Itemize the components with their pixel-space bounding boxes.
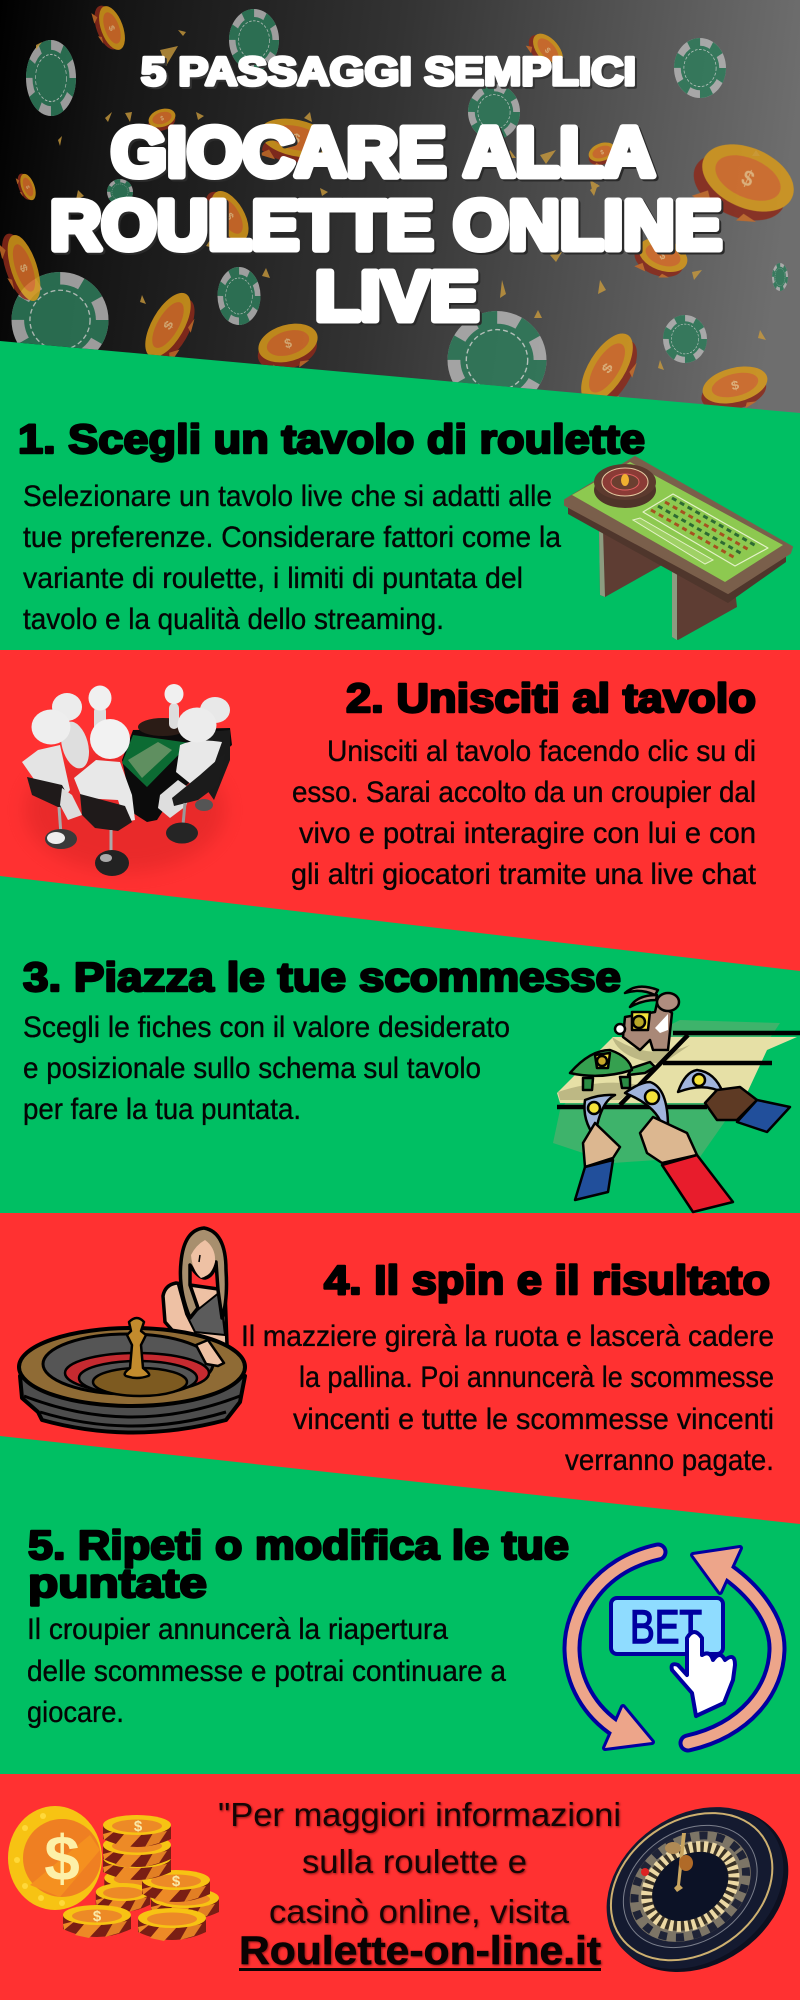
panel: header background with chips and coins — [0, 0, 800, 420]
center hand — [625, 1082, 733, 1212]
dollar signs: $ — [172, 1873, 181, 1890]
text: step 4 body — [241, 1320, 774, 1477]
dollar signs: $ — [93, 1908, 102, 1925]
big coin — [8, 1806, 102, 1910]
title: giocare alla roulette online live: GIOCARE ALLA — [111, 113, 655, 191]
scattered coins — [0, 1, 800, 418]
text: step 2 body: vivo e potrai interagire con lui e con — [299, 817, 756, 850]
heading: step 4: 4. Il spin e il risultato — [324, 1257, 770, 1303]
back players — [56, 718, 94, 772]
text: step 4 body: vincenti e tutte le scommesse vincenti — [293, 1403, 774, 1436]
text: footer call to action: casinò online, visita — [269, 1893, 570, 1930]
text: step 1 body: tue preferenze. Considerare fattori come la — [23, 521, 561, 554]
text: footer call to action — [218, 1796, 621, 1973]
confetti — [36, 30, 766, 370]
heading: step 5: 5. Ripeti o modifica le tue — [28, 1522, 569, 1568]
title: giocare alla roulette online live — [50, 113, 722, 335]
table — [122, 728, 232, 822]
right player — [176, 741, 222, 785]
heading: step 5: puntate — [28, 1560, 207, 1606]
text: step 2 body: gli altri giocatori tramite una live chat — [291, 858, 757, 891]
dealer hand — [196, 1340, 224, 1366]
text: step 4 body: verranno pagate. — [565, 1444, 774, 1477]
text: footer call to action: sulla roulette e — [302, 1843, 527, 1880]
icon: gold coins — [8, 1806, 219, 1941]
croupier — [163, 1228, 227, 1352]
text: step 5 body: Il croupier annuncerà la riapertura — [27, 1613, 448, 1646]
bet button — [611, 1598, 723, 1654]
front player — [74, 760, 135, 822]
icon: bet button with cycle arrows: BET — [630, 1600, 702, 1653]
panel: step 4 — [19, 1228, 774, 1477]
text: step 2 body: esso. Sarai accolto da un croupier dal — [292, 776, 756, 809]
turtle — [570, 1050, 655, 1090]
text: footer call to action: Roulette-on-line.it — [239, 1929, 601, 1973]
left hand — [575, 1095, 620, 1200]
text: step 5 body: giocare. — [27, 1696, 124, 1729]
rabbit — [615, 987, 679, 1050]
text: step 5 body — [27, 1613, 506, 1729]
cycle arrows — [572, 1548, 777, 1748]
heading: step 5 — [28, 1522, 569, 1606]
icon: hands placing chips on betting table — [553, 987, 800, 1212]
panel: step 1 — [18, 416, 792, 640]
heading: step 3: 3. Piazza le tue scommesse — [23, 954, 621, 1000]
panel: step 2 — [22, 675, 757, 891]
icon: roulette wheel — [575, 1772, 800, 2000]
left player — [22, 745, 70, 798]
text: step 1 body — [23, 480, 561, 636]
text: step 5 body: delle scommesse e potrai continuare a — [27, 1655, 506, 1688]
wheel spindle — [674, 1833, 686, 1892]
heading: step 2: 2. Unisciti al tavolo — [346, 675, 756, 721]
panel: step 3 — [23, 954, 800, 1212]
text: step 3 body: per fare la tua puntata. — [23, 1093, 301, 1126]
title: 5 passaggi semplici: 5 PASSAGGI SEMPLICI — [141, 50, 636, 94]
wheel base — [20, 1376, 245, 1432]
icon: players around a roulette table — [22, 684, 232, 876]
text: step 2 body: Unisciti al tavolo facendo clic su di — [327, 735, 756, 768]
text: step 2 body — [291, 735, 757, 891]
title: giocare alla roulette online live: ROULETTE ONLINE — [50, 186, 722, 264]
text: step 1 body: Selezionare un tavolo live che si adatti alle — [23, 480, 552, 513]
text: step 3 body — [23, 1011, 510, 1126]
icon: gold coins: $ — [44, 1822, 80, 1894]
coin stacks — [104, 1868, 176, 1901]
panel: footer — [8, 1772, 800, 2000]
icon: bet button with cycle arrows — [572, 1548, 777, 1748]
spindle — [125, 1318, 149, 1378]
title: giocare alla roulette online live: LIVE — [315, 257, 479, 335]
text: step 3 body: e posizionale sullo schema sul tavolo — [23, 1052, 481, 1085]
text: step 1 body: tavolo e la qualità dello streaming. — [23, 603, 444, 636]
text: step 4 body: Il mazziere girerà la ruota e lascerà cadere — [241, 1320, 774, 1353]
text: step 3 body: Scegli le fiches con il valore desiderato — [23, 1011, 510, 1044]
text: step 1 body: variante di roulette, i limiti di puntata del — [23, 562, 523, 595]
heading: step 1: 1. Scegli un tavolo di roulette — [18, 416, 645, 462]
icon: roulette table — [565, 457, 792, 640]
pointer hand — [672, 1632, 735, 1716]
text: footer call to action: "Per maggiori informazioni — [218, 1796, 621, 1833]
panel: step 5 — [27, 1522, 777, 1748]
dollar signs — [93, 1818, 181, 1925]
scattered chips — [11, 9, 788, 409]
right hand — [678, 1070, 790, 1132]
icon: croupier with roulette wheel — [19, 1228, 245, 1432]
dollar signs: $ — [134, 1818, 143, 1835]
